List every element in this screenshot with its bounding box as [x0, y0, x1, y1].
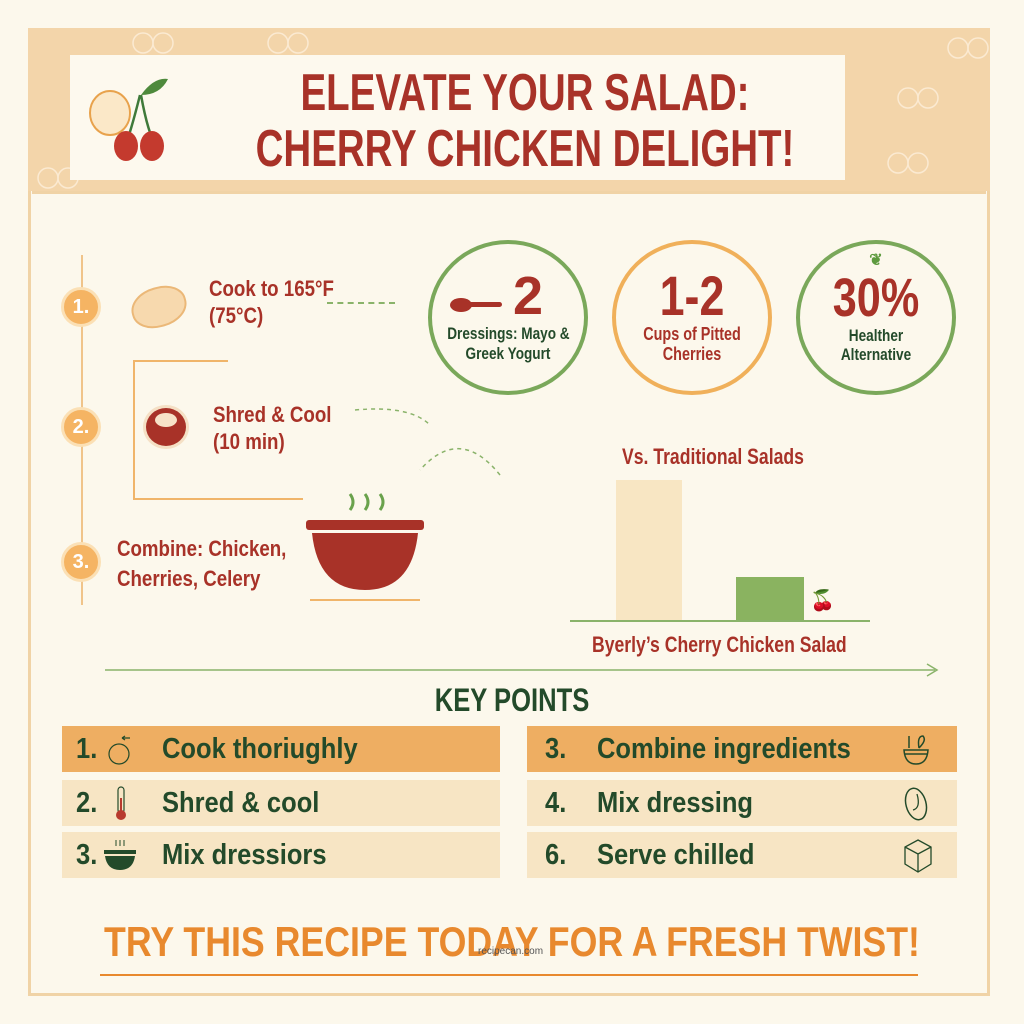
call to action: TRY THIS RECIPE TODAY FOR A FRESH TWIST! — [104, 918, 920, 965]
item 3: Mix dressiors — [162, 839, 327, 871]
stat circle 1 — [428, 240, 588, 395]
item 2 — [62, 780, 500, 826]
header band — [28, 28, 990, 191]
stat circle 2: Cups of Pitted — [643, 324, 741, 344]
stat circle 3: Alternative — [841, 345, 911, 364]
title text: CHERRY CHICKEN DELIGHT! — [256, 120, 794, 178]
stat circle 3: Healther — [849, 326, 903, 345]
step 1: (75°C) — [209, 303, 263, 328]
icon: chicken and cherries — [89, 78, 168, 161]
bar chart: Vs. Traditional Salads — [622, 444, 804, 469]
item 3: 3. — [76, 839, 97, 871]
stat circle 3: ❦ — [869, 252, 883, 269]
stat circle 1: 2 — [513, 266, 543, 326]
item 6 — [527, 832, 957, 878]
stat circle 2: Cherries — [663, 344, 721, 364]
stat circle 3: 30% — [833, 268, 919, 328]
step 1: Cook to 165°F — [209, 276, 334, 301]
step 3: Combine: Chicken, — [117, 536, 286, 561]
item 4 — [527, 726, 957, 772]
title text: ELEVATE YOUR SALAD: — [301, 64, 749, 122]
key points list — [62, 726, 957, 878]
step 3 — [61, 536, 286, 591]
item 4: Combine ingredients — [597, 733, 851, 765]
icon: bowl — [306, 493, 424, 601]
item 2: 2. — [76, 787, 97, 819]
item 3 — [62, 832, 500, 878]
item 5 — [527, 780, 957, 826]
title text — [256, 64, 794, 178]
item 4: 3. — [545, 733, 566, 765]
watermark: recipecan.com — [478, 946, 543, 957]
step 3: Cherries, Celery — [117, 566, 260, 591]
step 3: 3. — [73, 551, 89, 573]
bar chart — [570, 444, 870, 657]
step 2: Shred & Cool — [213, 402, 331, 427]
item 1 — [62, 726, 500, 772]
stat circle 3 — [796, 240, 956, 395]
divider arrow — [105, 663, 938, 677]
item 5: Mix dressing — [597, 787, 753, 819]
item 1: 1. — [76, 733, 97, 765]
cta underline — [100, 974, 918, 976]
step 2 — [61, 402, 331, 454]
stat circle 1: Dressings: Mayo & — [447, 324, 570, 343]
arrow: dashed curve — [355, 408, 500, 476]
steps timeline — [61, 255, 395, 605]
step 2: 2. — [73, 416, 89, 438]
stat circle 2: 1-2 — [660, 264, 724, 327]
title box — [70, 55, 845, 180]
stat circle 1: Greek Yogurt — [466, 344, 550, 363]
item 2: Shred & cool — [162, 787, 319, 819]
step 2: (10 min) — [213, 429, 285, 454]
step 1: 1. — [73, 296, 89, 318]
step 1 — [61, 276, 395, 328]
stat circle 2 — [612, 240, 772, 395]
item 6: Serve chilled — [597, 839, 754, 871]
item 1: Cook thoriughly — [162, 733, 358, 765]
item 6: 6. — [545, 839, 566, 871]
bar chart: 🍒 — [810, 590, 835, 612]
bar chart: Byerly’s Cherry Chicken Salad — [592, 632, 847, 657]
body panel — [32, 191, 986, 993]
item 5: 4. — [545, 787, 566, 819]
key points heading: KEY POINTS — [435, 682, 589, 718]
